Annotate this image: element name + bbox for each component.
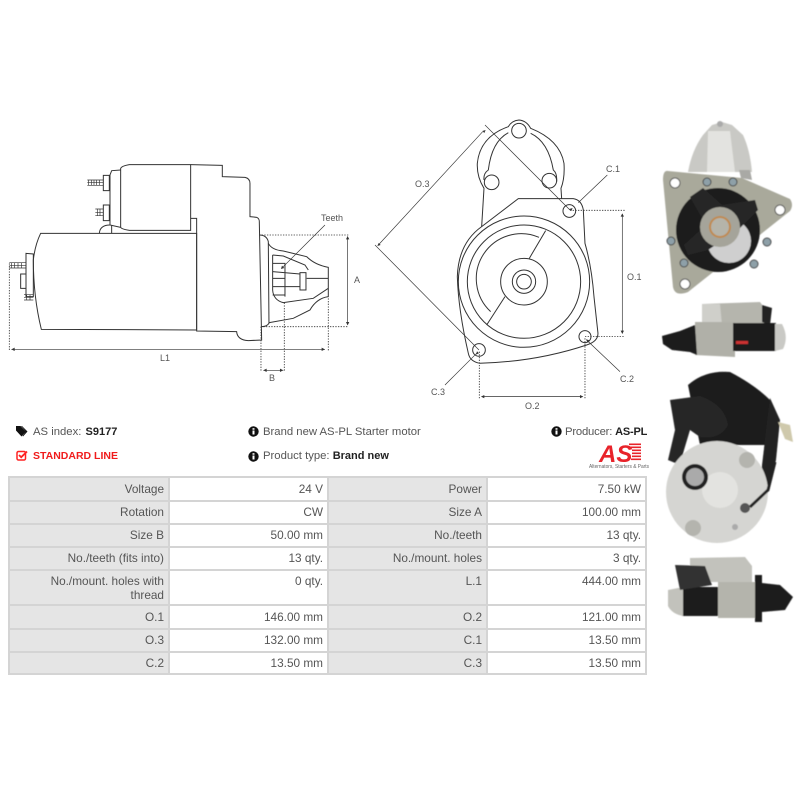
specification table: 13.50 mm [271, 656, 323, 670]
photo: starter motor front flange [663, 121, 792, 294]
front view dimension labels: O.2 [525, 401, 540, 411]
front view line drawing [375, 120, 625, 398]
specification table: thread [131, 588, 164, 602]
specification table: No./mount. holes [393, 551, 482, 565]
side view line drawing [9, 165, 349, 372]
front view dimension labels: C.3 [431, 387, 445, 397]
specification table [8, 476, 647, 675]
specification table: 24 V [299, 482, 323, 496]
specification table: 0 qty. [295, 574, 323, 588]
specification table: 132.00 mm [264, 633, 323, 647]
specification table: C.1 [464, 633, 482, 647]
specification table: C.3 [464, 656, 482, 670]
standard line label: STANDARD LINE [33, 450, 118, 462]
specification table: No./teeth (fits into) [68, 551, 164, 565]
icon: red checkbox [16, 450, 28, 461]
icon: info [248, 451, 259, 462]
specification table: Size A [449, 505, 482, 519]
specification table: 7.50 kW [598, 482, 641, 496]
side view dimension labels: A [354, 275, 360, 285]
photo: starter motor rear view [666, 372, 793, 543]
specification table: 13.50 mm [589, 633, 641, 647]
side view dimension labels [160, 213, 360, 383]
specification table: O.3 [145, 633, 164, 647]
specification table: CW [303, 505, 323, 519]
specification table: 121.00 mm [582, 610, 641, 624]
producer text: Producer: AS-PL [565, 426, 647, 438]
specification table: No./mount. holes with [51, 574, 164, 588]
specification table: 146.00 mm [264, 610, 323, 624]
specification table: 50.00 mm [271, 528, 323, 542]
photo: starter motor side view one [662, 302, 786, 357]
specification table: Size B [130, 528, 164, 542]
side view dimension labels: Teeth [321, 213, 343, 223]
front view dimension labels: C.2 [620, 374, 634, 384]
specification table: 100.00 mm [582, 505, 641, 519]
front view dimension labels: O.1 [627, 272, 642, 282]
specification table: 13 qty. [288, 551, 323, 565]
specification table: C.2 [146, 656, 164, 670]
specification table: L.1 [466, 574, 482, 588]
front view dimension labels: C.1 [606, 164, 620, 174]
specification table: 444.00 mm [582, 574, 641, 588]
icon: info [551, 426, 562, 437]
specification table: O.1 [145, 610, 164, 624]
icon: tags [16, 426, 28, 436]
front view dimension labels: O.3 [415, 179, 430, 189]
side view dimension labels: B [269, 373, 275, 383]
product type text: Product type: Brand new [263, 450, 389, 462]
specification table: Rotation [120, 505, 164, 519]
product description text: Brand new AS-PL Starter motor [263, 426, 421, 438]
specification table: Power [449, 482, 482, 496]
specification table: 13.50 mm [589, 656, 641, 670]
AS logo [589, 442, 649, 470]
specification table: No./teeth [434, 528, 482, 542]
specification table: 3 qty. [613, 551, 641, 565]
AS logo: Alternators, Starters & Parts [589, 464, 649, 470]
side view dimension labels: L1 [160, 353, 170, 363]
icon: info [248, 426, 259, 437]
specification table: Voltage [125, 482, 164, 496]
photo: starter motor side view two [668, 557, 793, 622]
specification table: O.2 [463, 610, 482, 624]
front view dimension labels [415, 164, 642, 411]
AS index text: AS index: S9177 [33, 426, 117, 438]
specification table: 13 qty. [606, 528, 641, 542]
